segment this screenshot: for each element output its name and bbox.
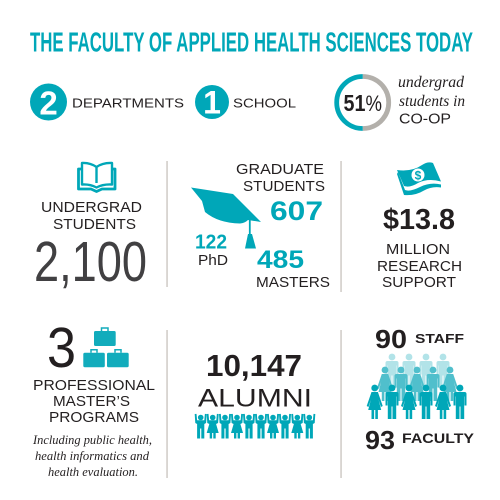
number: 122 PhD: 122 <box>195 232 227 254</box>
number: 90 staff: STAFF <box>415 331 464 346</box>
label: million research support: SUPPORT <box>382 274 456 291</box>
number: 90 staff: 90 <box>375 324 407 354</box>
number: 485 masters: MASTERS <box>256 274 330 291</box>
icon: staff and faculty figures <box>367 354 466 419</box>
number: $13.8: $13.8 <box>383 204 455 236</box>
note: program list <box>32 432 152 479</box>
stat: 1 school: 1 <box>203 84 221 120</box>
number: 485 masters <box>256 246 330 291</box>
number: 93 faculty: 93 <box>365 425 395 455</box>
label: graduate students: GRADUATE <box>236 161 324 178</box>
stat: 2 departments <box>30 84 184 122</box>
label: million research support <box>377 241 462 291</box>
label: undergrad students: UNDERGRAD <box>41 199 142 216</box>
panel: alumni <box>195 348 315 438</box>
panel: professional master's programs <box>32 316 155 479</box>
number: 10,147: 10,147 <box>206 348 302 383</box>
panel: graduate students <box>191 161 330 291</box>
icon: row of alumni figures <box>195 414 315 438</box>
panel: research support <box>377 162 462 291</box>
note: program list: health evaluation. <box>48 464 138 479</box>
number: 2,100: 2,100 <box>34 230 147 294</box>
label: undergrad students <box>41 199 142 233</box>
stat: 51% co-op donut: 51 <box>344 90 366 116</box>
stat: 51% co-op donut: CO-OP <box>399 110 451 128</box>
stat: 2 departments: 2 <box>39 84 58 122</box>
label: million research support: MILLION <box>386 241 450 258</box>
icon: open book <box>78 163 115 192</box>
label: professional master's programs: MASTER’S <box>53 393 130 410</box>
stat: 51% co-op donut <box>337 74 465 128</box>
stat: 1 school: SCHOOL <box>233 96 296 110</box>
number: 607 total: 607 <box>270 196 323 226</box>
label: professional master's programs: PROFESSIONAL <box>33 377 155 394</box>
number: 122 PhD: PhD <box>198 252 228 269</box>
icon: three briefcases <box>83 328 129 367</box>
number: 93 faculty <box>365 425 475 455</box>
number: 122 PhD <box>195 232 228 269</box>
label: graduate students: STUDENTS <box>243 178 325 195</box>
number: 93 faculty: FACULTY <box>402 430 475 446</box>
label: graduate students <box>236 161 325 195</box>
panel: undergrad students <box>34 163 147 294</box>
stat: 51% co-op donut: undergrad <box>398 74 464 91</box>
stat: 51% co-op donut: students in <box>399 93 465 110</box>
number: 3: 3 <box>47 316 76 380</box>
icon: banknotes: $ <box>415 168 422 182</box>
icon: graduation cap <box>191 188 261 248</box>
note: program list: health informatics and <box>35 448 149 463</box>
note: program list: Including public health, <box>32 432 152 447</box>
label: undergrad students: STUDENTS <box>53 216 136 233</box>
stat: 1 school <box>195 84 296 120</box>
label: alumni: ALUMNI <box>198 384 312 412</box>
label: professional master's programs: PROGRAMS <box>49 409 139 426</box>
stat: 2 departments: DEPARTMENTS <box>72 96 184 110</box>
number: 90 staff <box>375 324 464 354</box>
stat: 51% co-op donut: % <box>366 91 382 116</box>
number: 485 masters: 485 <box>257 246 304 274</box>
label: professional master's programs <box>33 377 155 426</box>
label: million research support: RESEARCH <box>377 258 462 275</box>
panel: staff and faculty <box>365 324 475 455</box>
